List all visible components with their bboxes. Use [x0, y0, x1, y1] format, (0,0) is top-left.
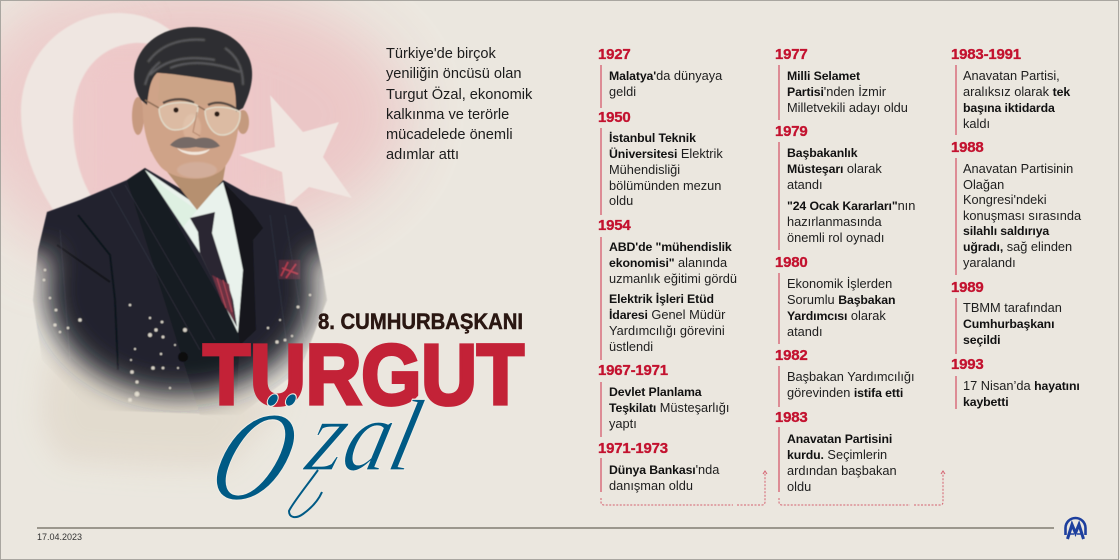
timeline column 2: Başbakan Yardımcılığı	[787, 369, 915, 384]
timeline column 2: önemli rol oynadı	[787, 230, 884, 244]
timeline column 3: uğradı, sağ elinden	[963, 239, 1072, 254]
TURGUT: TURGUT	[203, 327, 524, 423]
timeline column 2: ardından başbakan	[787, 463, 897, 478]
timeline column 3: kaybetti	[963, 395, 1009, 409]
timeline column 1: Devlet Planlama	[609, 385, 702, 399]
background flag and portrait	[1, 1, 418, 468]
1979: 1979	[775, 123, 808, 140]
timeline column 1: Dünya Bankası'nda	[609, 462, 719, 477]
timeline column 1: İstanbul Teknik	[609, 131, 696, 145]
portrait of Turgut Özal	[33, 27, 327, 415]
ears	[132, 97, 144, 135]
1983: 1983	[775, 409, 808, 426]
timeline column 1: ekonomisi" alanında	[609, 255, 727, 270]
arrow: column 2 to column 3	[779, 471, 945, 505]
timeline column 1: Yardımcılığı görevini	[609, 323, 725, 338]
timeline column 2: Sorumlu Başbakan	[787, 292, 895, 306]
intro text: adımlar attı	[386, 147, 459, 163]
smile	[177, 148, 210, 155]
intro text: yeniliğin öncüsü olan	[386, 66, 522, 82]
1988: 1988	[951, 139, 984, 156]
timeline column 2: görevinden istifa etti	[787, 384, 903, 400]
mustache	[170, 137, 220, 148]
crescent	[21, 13, 180, 222]
timeline column 2: oldu	[787, 478, 811, 494]
timeline column 3: Olağan	[963, 176, 1004, 192]
button	[178, 352, 188, 362]
1980: 1980	[775, 254, 808, 271]
1993: 1993	[951, 356, 984, 373]
timeline column 1: üstlendi	[609, 338, 653, 354]
date: 17.04.2023	[37, 532, 82, 542]
pocket square	[279, 260, 300, 279]
timeline column 3: TBMM tarafından	[963, 300, 1062, 315]
timeline column 2: Milli Selamet	[787, 69, 860, 83]
speckles	[43, 269, 311, 402]
timeline column 1: Elektrik İşleri Etüd	[609, 292, 714, 306]
intro text: kalkınma ve terörle	[386, 107, 509, 123]
timeline column 3: başına iktidarda	[963, 100, 1055, 114]
Özal	[194, 380, 433, 527]
timeline column 3: Kongresi'ndeki	[963, 192, 1047, 207]
1989: 1989	[951, 279, 984, 296]
timeline column 1: Mühendisliği	[609, 162, 680, 177]
timeline column 2: atandı	[787, 324, 823, 338]
intro text: Turgut Özal, ekonomik	[386, 87, 532, 103]
timeline column 3: yaralandı	[963, 255, 1016, 270]
timeline column 1: ABD'de "mühendislik	[609, 240, 732, 254]
footer rule	[37, 527, 1054, 529]
timeline column 3: aralıksız olarak tek	[963, 84, 1070, 98]
1977: 1977	[775, 46, 808, 63]
timeline column 2: Milletvekili adayı oldu	[787, 100, 908, 115]
nose shadow	[193, 112, 200, 136]
timeline column 2: Partisi'nden İzmir	[787, 84, 886, 99]
timeline column 1: Üniversitesi Elektrik	[609, 146, 723, 161]
timeline column 1: yaptı	[609, 416, 637, 431]
glasses	[145, 100, 240, 135]
intro text: mücadelede önemli	[386, 127, 513, 143]
subtitle: 8. CUMHURBAŞKANI	[318, 309, 523, 334]
timeline column 3: Cumhurbaşkanı	[963, 316, 1054, 330]
hair	[134, 27, 252, 112]
timeline column 1: bölümünden mezun	[609, 178, 721, 192]
timeline column 1: Malatya'da dünyaya	[609, 68, 722, 83]
Özal: zal	[295, 380, 433, 493]
timeline column 1: danışman oldu	[609, 478, 693, 493]
icon: AA logo	[1064, 516, 1087, 540]
pink flag wash	[0, 0, 405, 260]
1927: 1927	[598, 46, 631, 63]
timeline column 2: "24 Ocak Kararları"nın	[787, 198, 915, 213]
intro text	[386, 46, 532, 163]
timeline column 1: Teşkilatı Müsteşarlığı	[609, 400, 729, 415]
timeline column 2: Ekonomik İşlerden	[787, 276, 892, 291]
timeline column 2: Müsteşarı olarak	[787, 161, 882, 176]
timeline column 3: Anavatan Partisinin	[963, 161, 1073, 176]
eyes	[173, 107, 179, 113]
timeline column 1: geldi	[609, 84, 636, 99]
1950: 1950	[598, 109, 631, 126]
suit	[33, 168, 327, 415]
timeline column 3: kaldı	[963, 116, 990, 130]
arrow: column 1 to column 2	[601, 471, 767, 505]
timeline column 3: silahlı saldırıya	[963, 224, 1049, 238]
1967-1971: 1967-1971	[598, 362, 668, 379]
watercolor stain	[40, 350, 285, 468]
Özal: Ö	[194, 386, 315, 527]
timeline column 2: Yardımcısı olarak	[787, 308, 886, 322]
eyebrows	[163, 99, 236, 109]
timeline column 1: oldu	[609, 193, 633, 208]
1983-1991: 1983-1991	[951, 46, 1021, 63]
timeline column 2: Anavatan Partisini	[787, 432, 892, 446]
timeline column 2: hazırlanmasında	[787, 214, 882, 229]
timeline column 3: konuşması sırasında	[963, 208, 1081, 222]
1954: 1954	[598, 217, 631, 234]
timeline column 1: uzmanlık eğitimi gördü	[609, 271, 737, 286]
timeline column 1: İdaresi Genel Müdür	[609, 307, 725, 322]
timeline column 3: seçildi	[963, 332, 1000, 346]
shirt	[145, 170, 243, 333]
neck and face	[150, 140, 230, 210]
intro text: Türkiye'de birçok	[386, 46, 496, 62]
timeline column 2: Başbakanlık	[787, 146, 857, 160]
timeline column 2: kurdu. Seçimlerin	[787, 447, 887, 462]
1971-1973: 1971-1973	[598, 440, 668, 457]
timeline column 2: atandı	[787, 177, 823, 192]
tie	[190, 212, 237, 327]
timeline column 3: Anavatan Partisi,	[963, 68, 1060, 83]
1982: 1982	[775, 347, 808, 364]
star	[239, 95, 352, 207]
timeline column 3: 17 Nisan’da hayatını	[963, 378, 1080, 393]
